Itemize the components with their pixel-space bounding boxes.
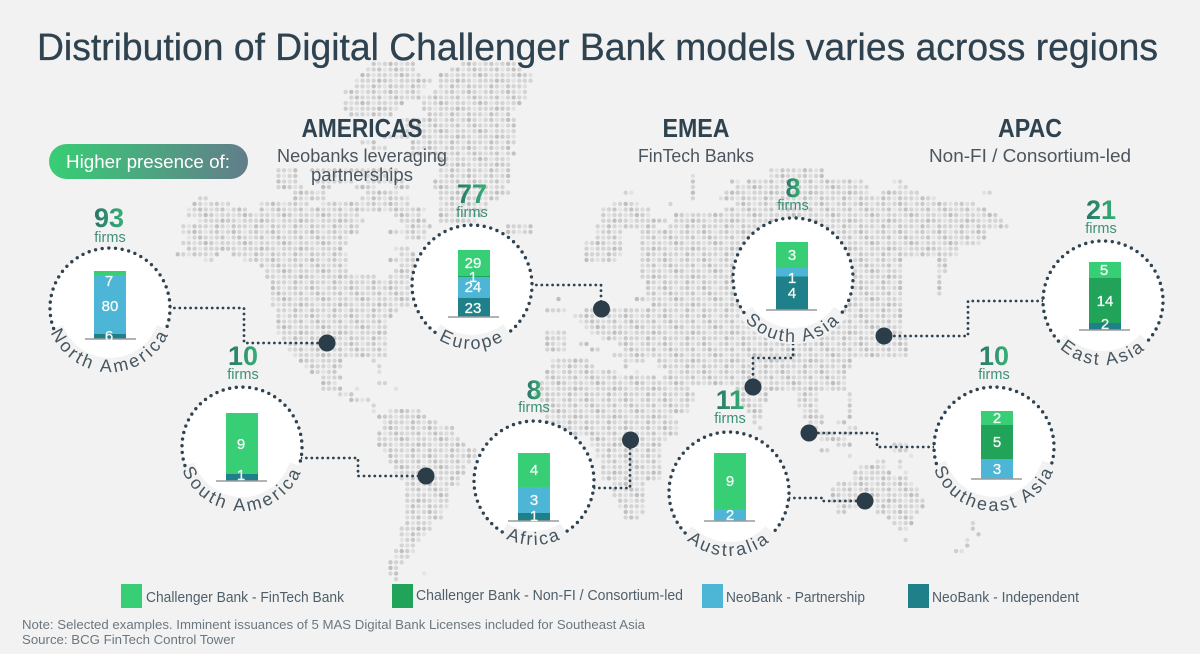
firm count: firms [94, 230, 126, 246]
firm count: 77 [457, 179, 487, 209]
panel: East Asia [1041, 195, 1165, 366]
stacked bar: 9 [726, 473, 734, 490]
firm count: 21 [1086, 195, 1116, 225]
firm count: 93 [94, 203, 124, 233]
heading: APAC: APAC [998, 113, 1062, 143]
legend item: Non-FI / Consortium-led: Challenger Bank - Non-FI / Consortium-led [416, 588, 683, 604]
connector: Africa [594, 432, 639, 488]
stacked bar: 1 [788, 270, 796, 287]
stacked bar [216, 413, 267, 484]
footnote and source [22, 617, 646, 647]
legend item: FinTech Bank [121, 584, 345, 608]
connector: South Asia [744, 344, 793, 396]
stacked bar: 9 [237, 436, 245, 453]
stacked bar: 14 [1097, 293, 1113, 310]
footnote and source: Note: Selected examples. Imminent issuances of 5 MAS Digital Bank Licenses included for Southeast Asia [22, 617, 646, 632]
heading: Americas: partnerships [311, 165, 413, 185]
panel: South America [180, 341, 304, 512]
firm count [518, 375, 550, 416]
stacked bar: 24 [465, 279, 481, 296]
region label: East Asia [1060, 340, 1144, 366]
firm count [714, 385, 746, 427]
heading: Americas [277, 113, 447, 185]
panel: Southeast Asia [932, 341, 1056, 512]
firm count: firms [518, 400, 550, 416]
legend item: Independent [908, 584, 1079, 608]
region label: Africa [506, 528, 560, 545]
stacked bar: 23 [465, 300, 481, 317]
stacked bar: 1 [237, 467, 245, 484]
connector: North America [169, 308, 336, 352]
panel: South Asia [731, 173, 855, 344]
stacked bar [508, 453, 559, 525]
firm count: 8 [526, 375, 542, 405]
connector: Australia [789, 492, 874, 510]
stacked bar [704, 453, 755, 524]
region label: Europe [440, 329, 502, 352]
region label: Southeast Asia [935, 466, 1054, 512]
panel: Europe [410, 179, 534, 352]
firm count [94, 203, 126, 246]
stacked bar: 2 [1101, 316, 1109, 333]
heading: Americas: Neobanks leveraging [277, 146, 447, 166]
firm count [978, 341, 1010, 383]
connector: Europe [531, 285, 610, 318]
stacked bar: 4 [530, 462, 538, 479]
legend item: Partnership: NeoBank - Partnership [726, 590, 865, 606]
stacked bar [971, 410, 1022, 479]
firm count: firms [777, 198, 809, 214]
region label: Australia [686, 533, 770, 556]
stacked bar [85, 271, 136, 345]
heading: Americas: AMERICAS [302, 113, 422, 143]
legend item: Independent: NeoBank - Independent [932, 590, 1079, 606]
heading: EMEA [638, 113, 754, 166]
heading: EMEA: FinTech Banks [638, 146, 754, 166]
connector: South America [301, 458, 434, 484]
region label: North America [51, 328, 168, 372]
stacked bar: 80 [102, 298, 118, 315]
stacked bar: 3 [993, 461, 1001, 478]
firm count: 11 [716, 385, 744, 415]
stacked bar: 1 [469, 269, 477, 286]
firm count: firms [456, 205, 488, 221]
footnote and source: Source: BCG FinTech Control Tower [22, 632, 236, 647]
connector: Southeast Asia [800, 424, 934, 447]
firm count: 10 [979, 341, 1009, 371]
legend item: FinTech Bank: Challenger Bank - FinTech Bank [146, 590, 345, 606]
stacked bar [1079, 262, 1130, 333]
stacked bar [448, 250, 499, 317]
stacked bar: 1 [530, 508, 538, 525]
stacked bar [766, 242, 817, 310]
legend item: Non-FI / Consortium-led [392, 584, 683, 608]
firm count: 10 [228, 341, 258, 371]
stacked bar: 2 [726, 507, 734, 524]
firm count: firms [714, 411, 746, 427]
firm count [1085, 195, 1117, 237]
firm count: 8 [785, 173, 801, 203]
stacked bar: 5 [1100, 262, 1108, 279]
region label: South Asia [746, 314, 840, 342]
stacked bar: 6 [105, 328, 113, 345]
pill: higher presence of: Higher presence of: [66, 152, 230, 172]
firm count: firms [1085, 221, 1117, 237]
stacked bar: 3 [788, 247, 796, 264]
stacked bar: 4 [788, 285, 796, 302]
dotted world map [178, 64, 1012, 579]
firm count [227, 341, 259, 383]
firm count: firms [227, 367, 259, 383]
stacked bar: 5 [993, 434, 1001, 451]
stacked bar: 7 [105, 273, 113, 290]
panel: Australia [667, 385, 791, 556]
pill: higher presence of [49, 144, 248, 179]
firm count [777, 173, 809, 214]
heading: EMEA: EMEA [662, 113, 730, 143]
region label: South America [184, 466, 301, 512]
connector: East Asia [876, 301, 1043, 344]
heading: APAC [929, 113, 1131, 166]
stacked bar: 29 [465, 255, 481, 272]
legend [121, 584, 1079, 608]
title: Distribution of Digital Challenger Bank models varies across regions [37, 27, 1158, 69]
panel: North America [48, 203, 172, 372]
legend item: Partnership [702, 584, 865, 608]
firm count [456, 179, 488, 221]
stacked bar: 3 [530, 492, 538, 509]
stacked bar: 2 [993, 410, 1001, 427]
firm count: firms [978, 367, 1010, 383]
panel: Africa [472, 375, 596, 545]
heading: APAC: Non-FI / Consortium-led [929, 146, 1131, 166]
